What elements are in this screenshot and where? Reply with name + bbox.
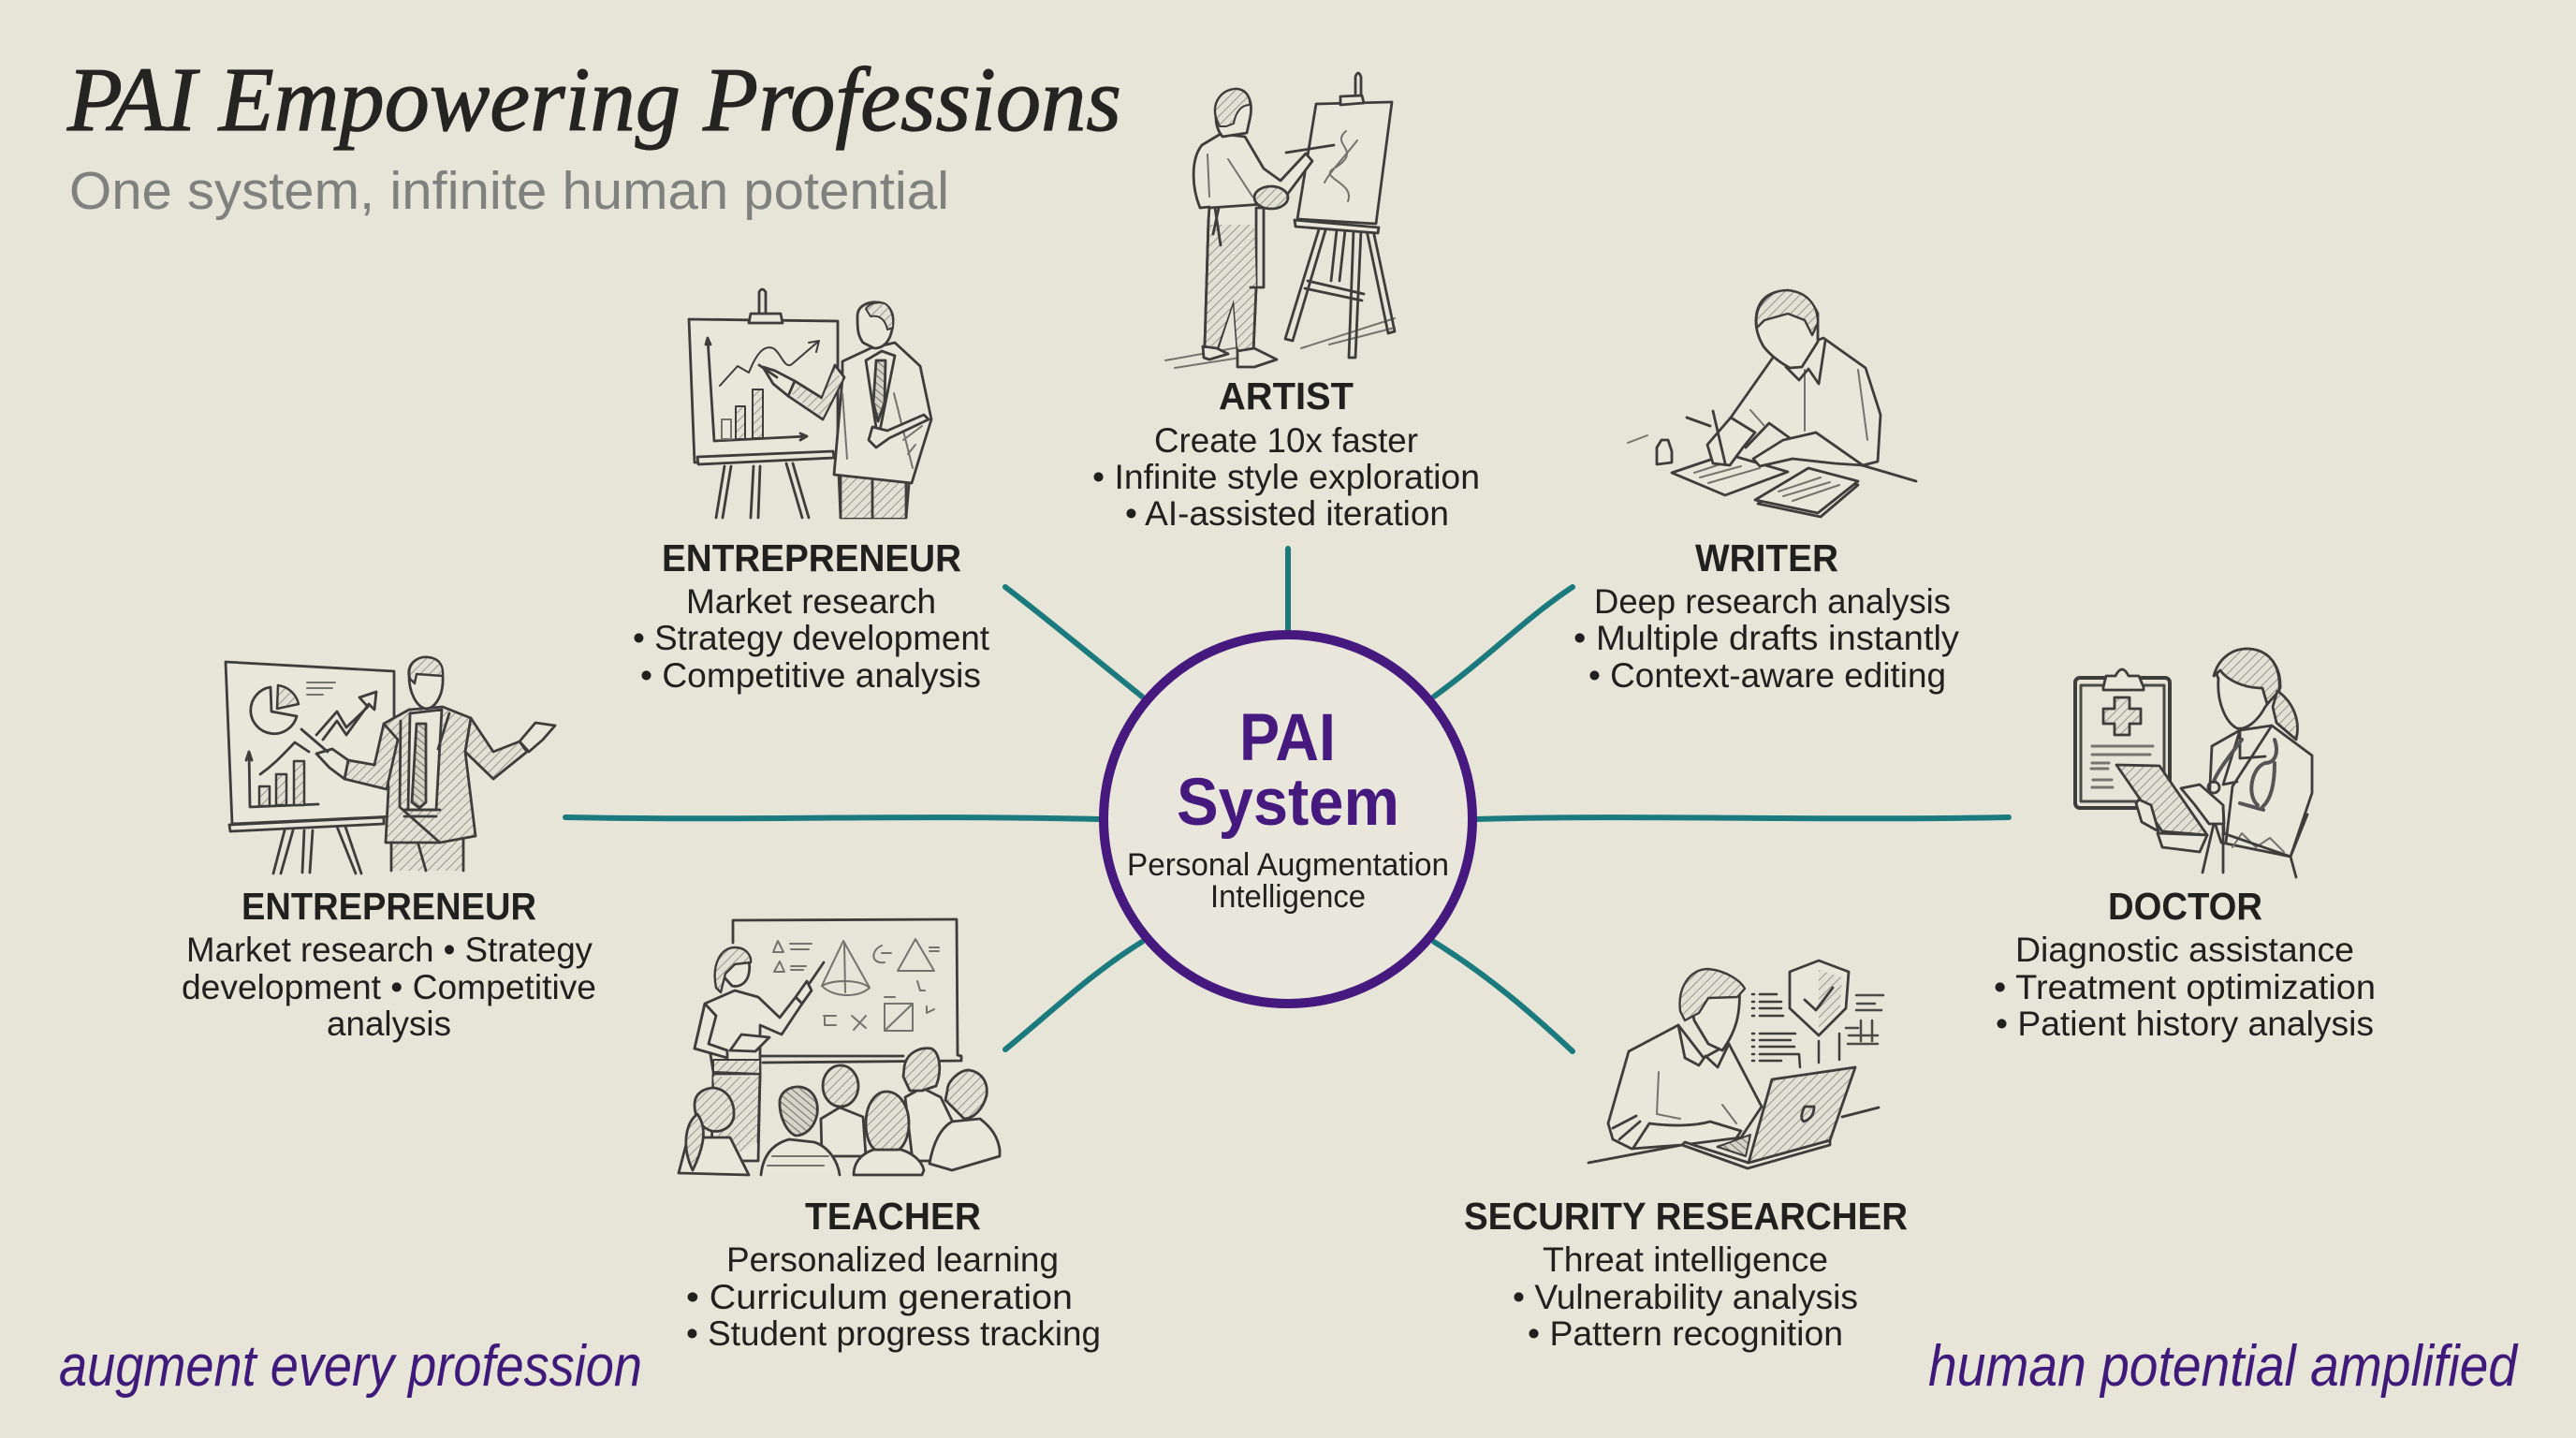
panel: doctor — [1994, 649, 2376, 1043]
text: artist benefits: Create 10x faster — [1154, 421, 1418, 460]
text: writer benefits: • Multiple drafts instantly — [1573, 619, 1960, 657]
icon: doctor with clipboard and tablet — [2075, 649, 2312, 877]
panel: writer — [1573, 290, 1960, 695]
heading: security researcher: SECURITY RESEARCHER — [1464, 1195, 1908, 1238]
heading: teacher: TEACHER — [805, 1195, 981, 1238]
panel: teacher — [679, 919, 1101, 1353]
icon: artist at easel — [1165, 73, 1395, 368]
tagline: left: augment every profession — [59, 1334, 642, 1399]
icon: teacher at whiteboard with students — [679, 919, 1000, 1175]
panel: entrepreneur (upper) — [633, 289, 990, 695]
central hub: PAI System: System — [1177, 766, 1399, 840]
text: entrepreneur benefits: development • Competitive — [182, 968, 596, 1006]
text: artist benefits: • AI-assisted iteration — [1125, 494, 1449, 533]
central hub: PAI System: Intelligence — [1210, 879, 1366, 915]
text: teacher benefits — [686, 1240, 1101, 1353]
heading: entrepreneur: ENTREPRENEUR — [242, 885, 536, 928]
text: teacher benefits: • Student progress tracking — [686, 1314, 1101, 1353]
text: writer benefits: • Context-aware editing — [1588, 656, 1946, 695]
text: doctor benefits: Diagnostic assistance — [2015, 931, 2354, 969]
text: entrepreneur benefits: analysis — [327, 1005, 451, 1043]
text: entrepreneur benefits: Market research — [686, 582, 936, 621]
icon: presenter with chart board — [689, 289, 931, 518]
heading: entrepreneur: ENTREPRENEUR — [662, 536, 961, 580]
text: teacher benefits: Personalized learning — [726, 1240, 1059, 1279]
text: entrepreneur benefits — [182, 931, 596, 1043]
title: PAI Empowering Professions — [66, 50, 1121, 150]
heading: writer: WRITER — [1695, 536, 1838, 580]
panel: artist — [1092, 73, 1480, 533]
text: writer benefits — [1573, 582, 1960, 695]
heading: doctor: DOCTOR — [2108, 885, 2262, 928]
text: artist benefits: • Infinite style exploration — [1092, 458, 1480, 496]
panel: entrepreneur (left) — [182, 657, 596, 1043]
icon: presenter with charts — [226, 657, 555, 873]
text: security researcher benefits: • Vulnerability analysis — [1513, 1278, 1858, 1316]
text: writer benefits: Deep research analysis — [1594, 582, 1951, 621]
text: security researcher benefits — [1513, 1240, 1858, 1353]
tagline: right: human potential amplified — [1928, 1334, 2519, 1399]
text: teacher benefits: • Curriculum generation — [686, 1278, 1073, 1316]
text: doctor benefits: • Treatment optimization — [1994, 968, 2376, 1006]
text: artist benefits — [1092, 421, 1480, 533]
central hub: PAI System: PAI — [1239, 701, 1336, 775]
panel: security researcher — [1464, 961, 1908, 1353]
central hub: PAI System — [1104, 635, 1472, 1004]
text: entrepreneur benefits — [633, 582, 990, 695]
icon: security researcher at laptop — [1588, 961, 1883, 1168]
text: security researcher benefits: Threat intelligence — [1543, 1240, 1828, 1279]
text: doctor benefits: • Patient history analysis — [1996, 1005, 2374, 1043]
text: security researcher benefits: • Pattern recognition — [1528, 1314, 1843, 1353]
text: doctor benefits — [1994, 931, 2376, 1043]
heading: artist: ARTIST — [1219, 374, 1354, 418]
central hub: PAI System: Personal Augmentation — [1127, 847, 1449, 883]
text: entrepreneur benefits: • Strategy development — [633, 619, 990, 657]
text: entrepreneur benefits: • Competitive analysis — [640, 656, 981, 695]
connector lines — [565, 549, 2009, 1051]
subtitle: One system, infinite human potential — [69, 161, 949, 221]
text: entrepreneur benefits: Market research • Strategy — [186, 931, 593, 969]
icon: writer at desk — [1628, 290, 1916, 517]
